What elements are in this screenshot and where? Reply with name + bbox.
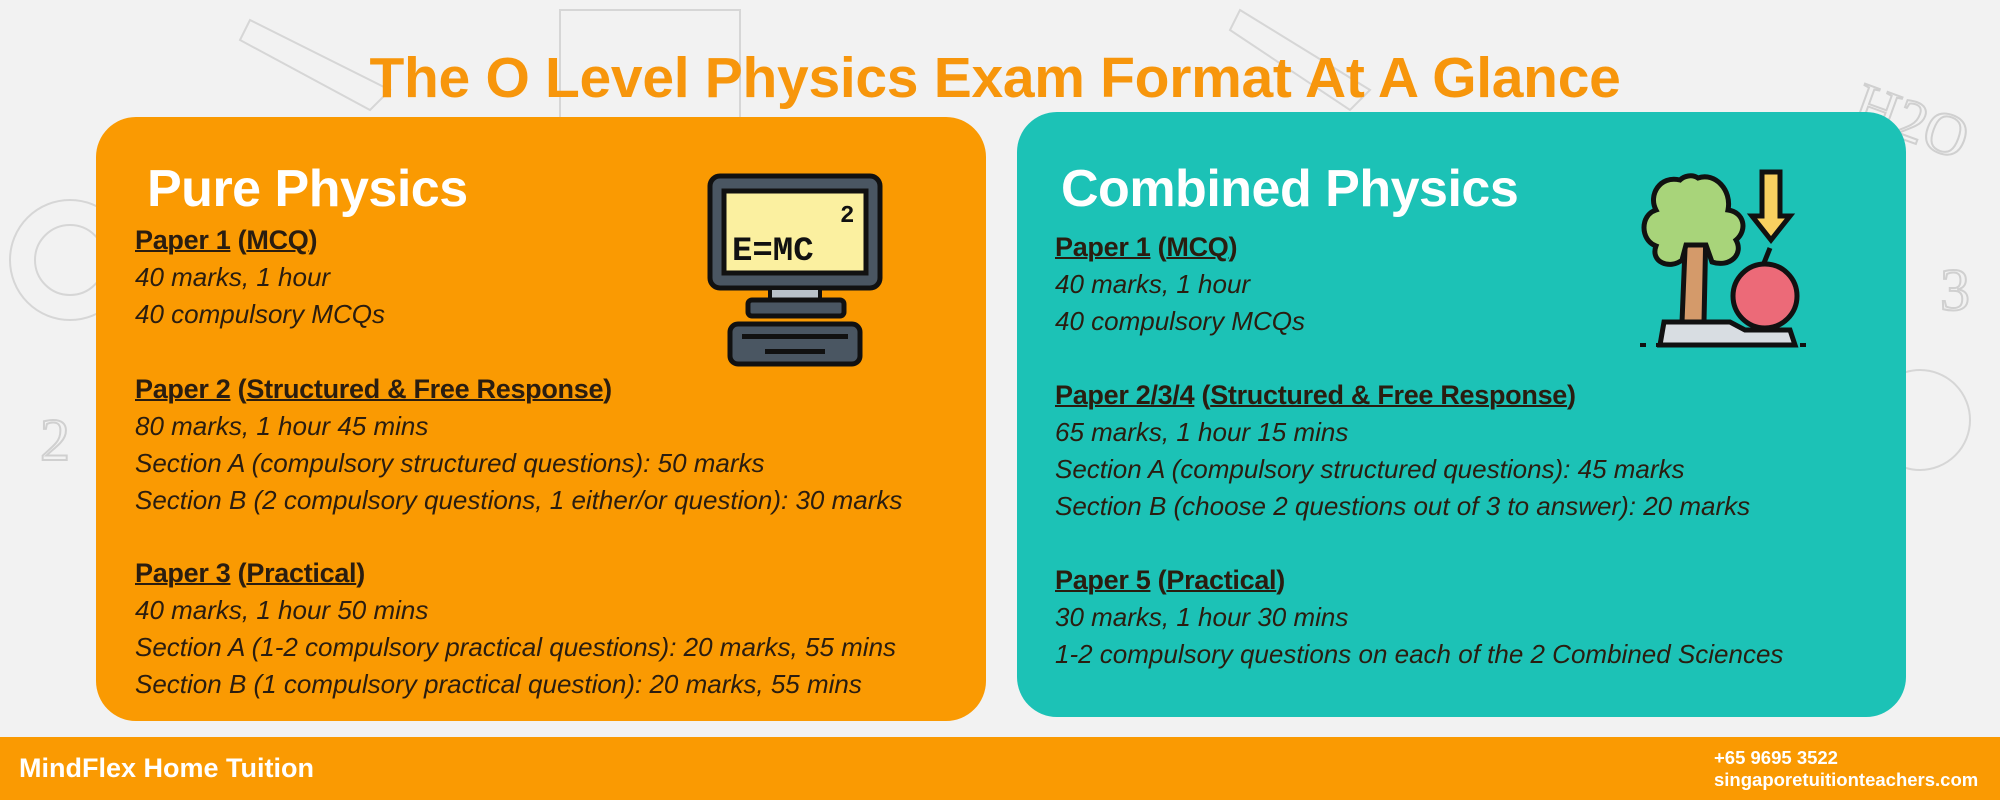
- text: pure physics papers: 80 marks, 1 hour 45 mins: [135, 411, 428, 441]
- text: combined physics papers: 30 marks, 1 hour 30 mins: [1055, 602, 1348, 632]
- text: pure physics papers: 40 compulsory MCQs: [135, 299, 385, 329]
- text: combined physics papers: 40 compulsory MCQs: [1055, 306, 1305, 336]
- text: combined physics papers: [1055, 232, 1783, 669]
- text: combined physics papers: Paper 5 (Practical): [1055, 565, 1285, 595]
- panel: combined physics: [1017, 112, 1906, 717]
- text: combined physics papers: Section B (choose 2 questions out of 3 to answer): 20 marks: [1055, 491, 1750, 521]
- text: pure physics papers: Paper 3 (Practical): [135, 558, 365, 588]
- text: pure physics papers: Section A (1-2 compulsory practical questions): 20 marks, 55 mins: [135, 632, 896, 662]
- text: pure physics papers: [135, 225, 902, 699]
- text: combined physics papers: 65 marks, 1 hour 15 mins: [1055, 417, 1348, 447]
- text: pure physics papers: 40 marks, 1 hour: [135, 262, 330, 292]
- footer: contact: singaporetuitionteachers.com: [1714, 769, 1978, 790]
- footer: contact: +65 9695 3522: [1714, 747, 1838, 768]
- text: pure physics papers: Paper 1 (MCQ): [135, 225, 317, 255]
- text: pure physics papers: Paper 2 (Structured & Free Response): [135, 374, 612, 404]
- text: pure physics papers: Section B (1 compulsory practical question): 20 marks, 55 mins: [135, 669, 862, 699]
- footer: brand: MindFlex Home Tuition: [19, 753, 314, 783]
- heading: pure physics: Pure Physics: [147, 160, 468, 218]
- text: combined physics papers: Paper 1 (MCQ): [1055, 232, 1237, 262]
- footer: contact: [1714, 747, 1978, 790]
- icon: computer E=MC2: 2: [840, 203, 854, 230]
- footer bar: [0, 737, 2000, 800]
- background sketches: 3: [1940, 257, 1970, 323]
- text: combined physics papers: 1-2 compulsory questions on each of the 2 Combined Sciences: [1055, 639, 1783, 669]
- heading: combined physics: Combined Physics: [1061, 160, 1518, 218]
- title: The O Level Physics Exam Format At A Glance: [369, 46, 1621, 110]
- background sketches: H2O: [1846, 70, 1978, 172]
- icon: computer E=MC2: E=MC: [732, 233, 814, 271]
- panel: pure physics: [96, 117, 986, 721]
- text: pure physics papers: Section A (compulsory structured questions): 50 marks: [135, 448, 765, 478]
- text: combined physics papers: Section A (compulsory structured questions): 45 marks: [1055, 454, 1685, 484]
- icon: computer E=MC2: [708, 174, 882, 366]
- text: pure physics papers: Section B (2 compulsory questions, 1 either/or question): 30 marks: [135, 485, 902, 515]
- text: combined physics papers: 40 marks, 1 hour: [1055, 269, 1250, 299]
- text: pure physics papers: 40 marks, 1 hour 50 mins: [135, 595, 428, 625]
- text: combined physics papers: Paper 2/3/4 (Structured & Free Response): [1055, 380, 1576, 410]
- background sketches: 2: [40, 407, 70, 473]
- icon: tree and apple: [1640, 170, 1806, 348]
